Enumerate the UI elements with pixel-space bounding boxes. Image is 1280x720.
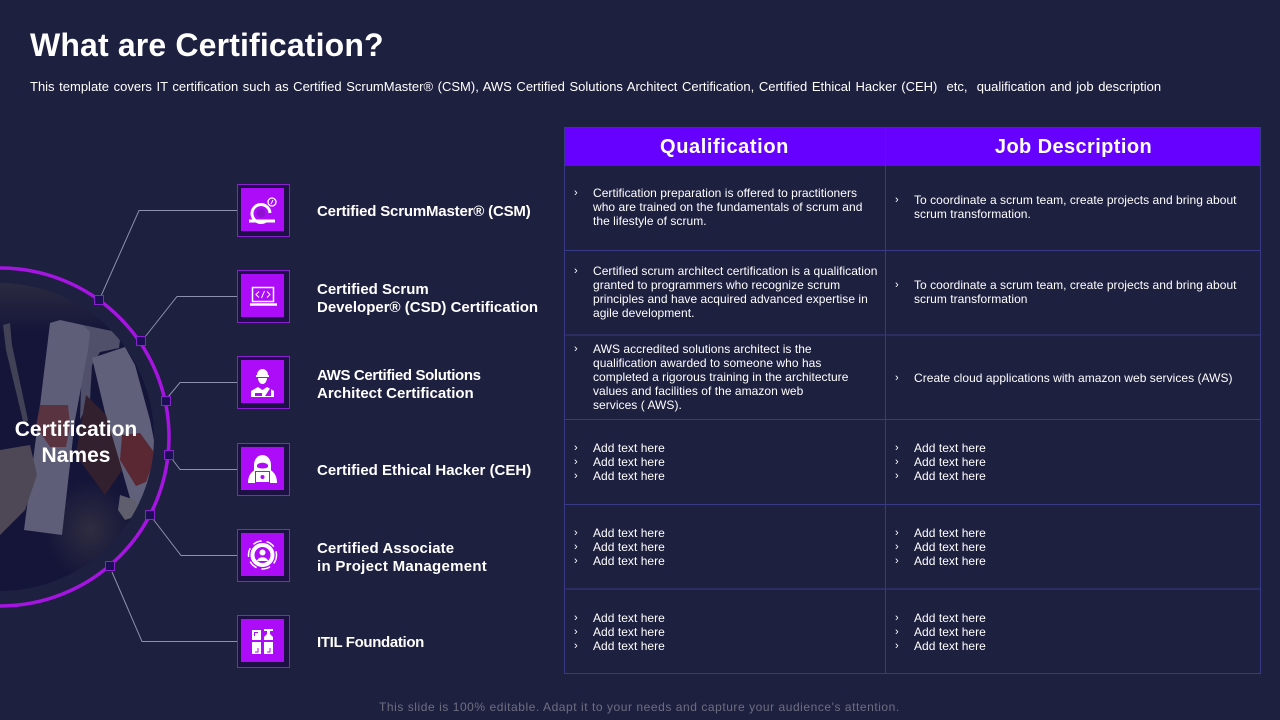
row 6 job — [895, 611, 986, 653]
text: › — [895, 442, 899, 454]
text: › — [574, 343, 578, 355]
connector lines — [101, 210, 237, 642]
row 5 job: Add text here — [914, 554, 986, 568]
row 3 qualification: completed a rigorous training in the architecture — [593, 370, 848, 384]
row 6 job: Add text here — [914, 639, 986, 653]
footer note: This slide is 100% editable. Adapt it to your needs and capture your audience's attention. — [379, 700, 900, 714]
icon: scrum cycle — [237, 184, 290, 237]
circle label — [15, 418, 137, 467]
name: ITIL: ITIL Foundation — [317, 634, 424, 651]
row 6 job: Add text here — [914, 625, 986, 639]
text: › — [574, 265, 578, 277]
name: CSD — [317, 281, 538, 316]
text: › — [574, 442, 578, 454]
title: What are Certification? — [30, 27, 384, 63]
row 2 qualification: principles and have acquired advanced expertise in — [593, 292, 868, 306]
row 5 job: Add text here — [914, 540, 986, 554]
row 4 job: Add text here — [914, 469, 986, 483]
text: › — [895, 555, 899, 567]
header: Qualification: Qualification — [660, 136, 789, 158]
row 2 qualification — [574, 264, 877, 320]
row 4 qualification: Add text here — [593, 441, 665, 455]
row 4 job — [895, 441, 986, 483]
row 1 qualification: the lifestyle of scrum. — [593, 214, 707, 228]
name: AWS — [317, 367, 481, 402]
row 3 qualification: values and facilities of the amazon web — [593, 384, 803, 398]
row 5 job: Add text here — [914, 526, 986, 540]
row 6 job: Add text here — [914, 611, 986, 625]
row 2 job: To coordinate a scrum team, create projects and bring about — [914, 278, 1237, 292]
row 6 qualification: Add text here — [593, 639, 665, 653]
circle label: Names — [42, 444, 110, 467]
row 4 qualification: Add text here — [593, 455, 665, 469]
row 1 qualification: Certification preparation is offered to practitioners — [593, 186, 857, 200]
ring nodes — [94, 296, 174, 570]
row 3 qualification: services ( AWS). — [593, 398, 682, 412]
row 2 qualification: Certified scrum architect certification is a qualification — [593, 264, 877, 278]
text: › — [574, 612, 578, 624]
row 4 qualification — [574, 441, 665, 483]
row 6 qualification: Add text here — [593, 625, 665, 639]
photo: diplomas in hands — [0, 280, 160, 595]
circular diagram: certification names — [0, 210, 237, 642]
table header — [564, 127, 1261, 166]
text: › — [895, 194, 899, 206]
row 1 job — [895, 193, 1237, 221]
name: AWS: AWS Certified Solutions — [317, 367, 481, 384]
name: Project Management: Certified Associate — [317, 540, 454, 557]
text: › — [895, 527, 899, 539]
row 5 qualification — [574, 526, 665, 568]
row 2 qualification: granted to programmers who recognize scrum — [593, 278, 840, 292]
row 1 qualification — [574, 186, 862, 228]
row 4 qualification: Add text here — [593, 469, 665, 483]
row 3 qualification: qualification awarded to someone who has — [593, 356, 821, 370]
circle label: Certification — [15, 418, 137, 441]
name: CSD: Certified Scrum — [317, 281, 429, 298]
row 1 qualification: who are trained on the fundamentals of scrum and — [593, 200, 862, 214]
row 4 job: Add text here — [914, 441, 986, 455]
text: › — [574, 626, 578, 638]
row 1 job: To coordinate a scrum team, create projects and bring about — [914, 193, 1237, 207]
row 5 job — [895, 526, 986, 568]
name: CSM: Certified ScrumMaster® (CSM) — [317, 203, 531, 220]
text: › — [574, 555, 578, 567]
name: CSD: Developer® (CSD) Certification — [317, 299, 538, 316]
header: Job Description: Job Description — [995, 136, 1152, 158]
text: › — [895, 612, 899, 624]
name: AWS: Architect Certification — [317, 385, 474, 402]
icon: gear person — [237, 529, 290, 582]
text: › — [895, 279, 899, 291]
text: › — [895, 640, 899, 652]
text: › — [895, 626, 899, 638]
row 3 job: Create cloud applications with amazon web services (AWS) — [914, 371, 1233, 385]
row 5 qualification: Add text here — [593, 554, 665, 568]
row 5 qualification: Add text here — [593, 526, 665, 540]
text: › — [574, 470, 578, 482]
text: › — [574, 541, 578, 553]
text: › — [895, 372, 899, 384]
row 6 qualification — [574, 611, 665, 653]
text: › — [895, 541, 899, 553]
text: › — [895, 456, 899, 468]
row 2 job: scrum transformation — [914, 292, 1028, 306]
icon: hacker — [237, 443, 290, 496]
icon: laptop code — [237, 270, 290, 323]
text: › — [574, 456, 578, 468]
row 5 qualification: Add text here — [593, 540, 665, 554]
row 2 qualification: agile development. — [593, 306, 694, 320]
row 3 qualification — [574, 342, 848, 412]
row 1 job: scrum transformation. — [914, 207, 1031, 221]
icon: engineer — [237, 356, 290, 409]
table: qualification and job description — [564, 127, 1261, 674]
row 2 job — [895, 278, 1237, 306]
text: › — [895, 470, 899, 482]
text: › — [574, 527, 578, 539]
subtitle: This template covers IT certification such as Certified ScrumMaster® (CSM), AWS Certified Solutions Architect Certification, Certified Ethical Hacker (CEH) etc, qualification and job description — [30, 79, 1161, 94]
row 4 job: Add text here — [914, 455, 986, 469]
grid — [564, 127, 1261, 674]
icon: itil boxes — [237, 615, 290, 668]
name: Project Management — [317, 540, 487, 575]
name: Project Management: in Project Management — [317, 558, 487, 575]
row 3 qualification: AWS accredited solutions architect is the — [593, 342, 812, 356]
text: › — [574, 187, 578, 199]
text: › — [574, 640, 578, 652]
ring — [0, 268, 169, 606]
row 6 qualification: Add text here — [593, 611, 665, 625]
name: CEH: Certified Ethical Hacker (CEH) — [317, 462, 531, 479]
